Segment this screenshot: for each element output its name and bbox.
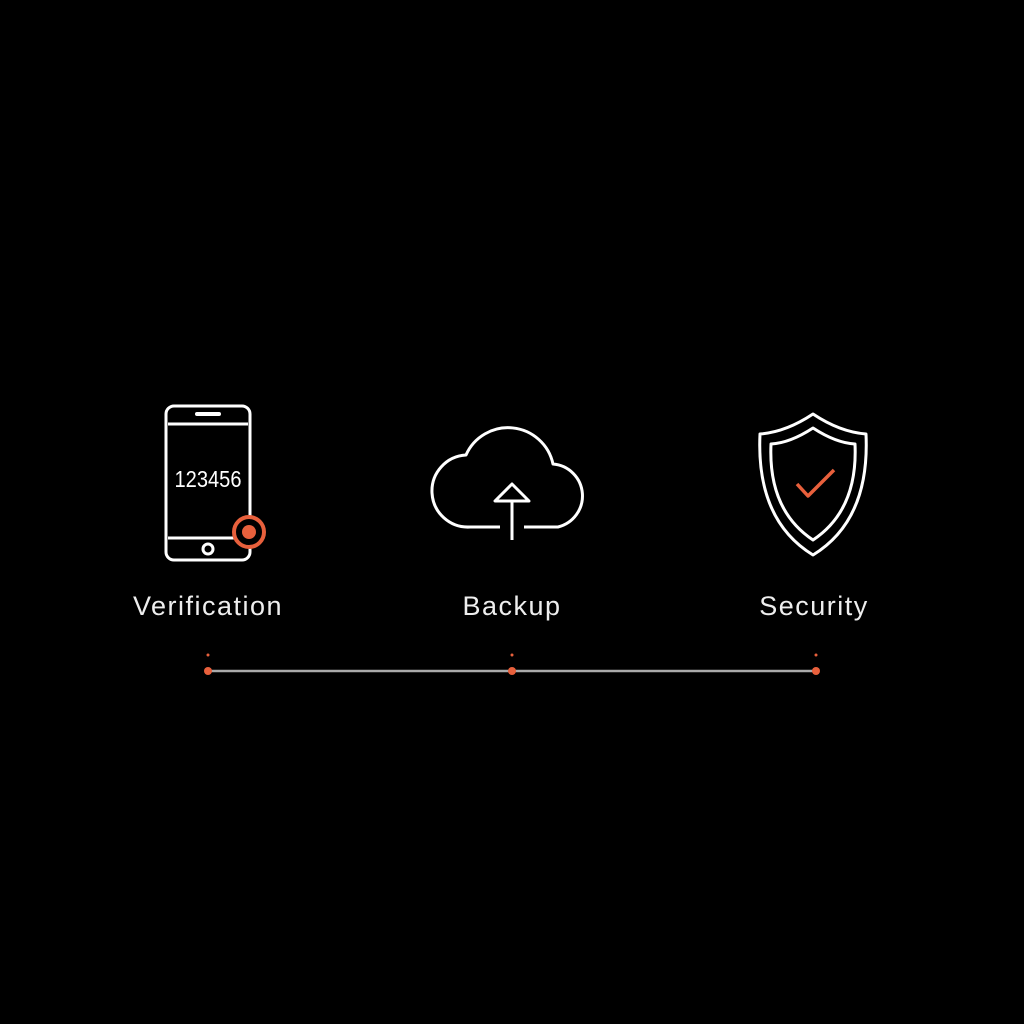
icon: cloud upload <box>430 426 584 540</box>
label: Backup: Backup <box>462 591 562 621</box>
icon: shield <box>758 412 868 556</box>
label: Security: Security <box>759 591 869 621</box>
icon: phone: 123456 <box>174 466 242 492</box>
timeline <box>204 654 820 675</box>
icon: phone <box>164 404 266 562</box>
label: Verification: Verification <box>133 591 283 621</box>
